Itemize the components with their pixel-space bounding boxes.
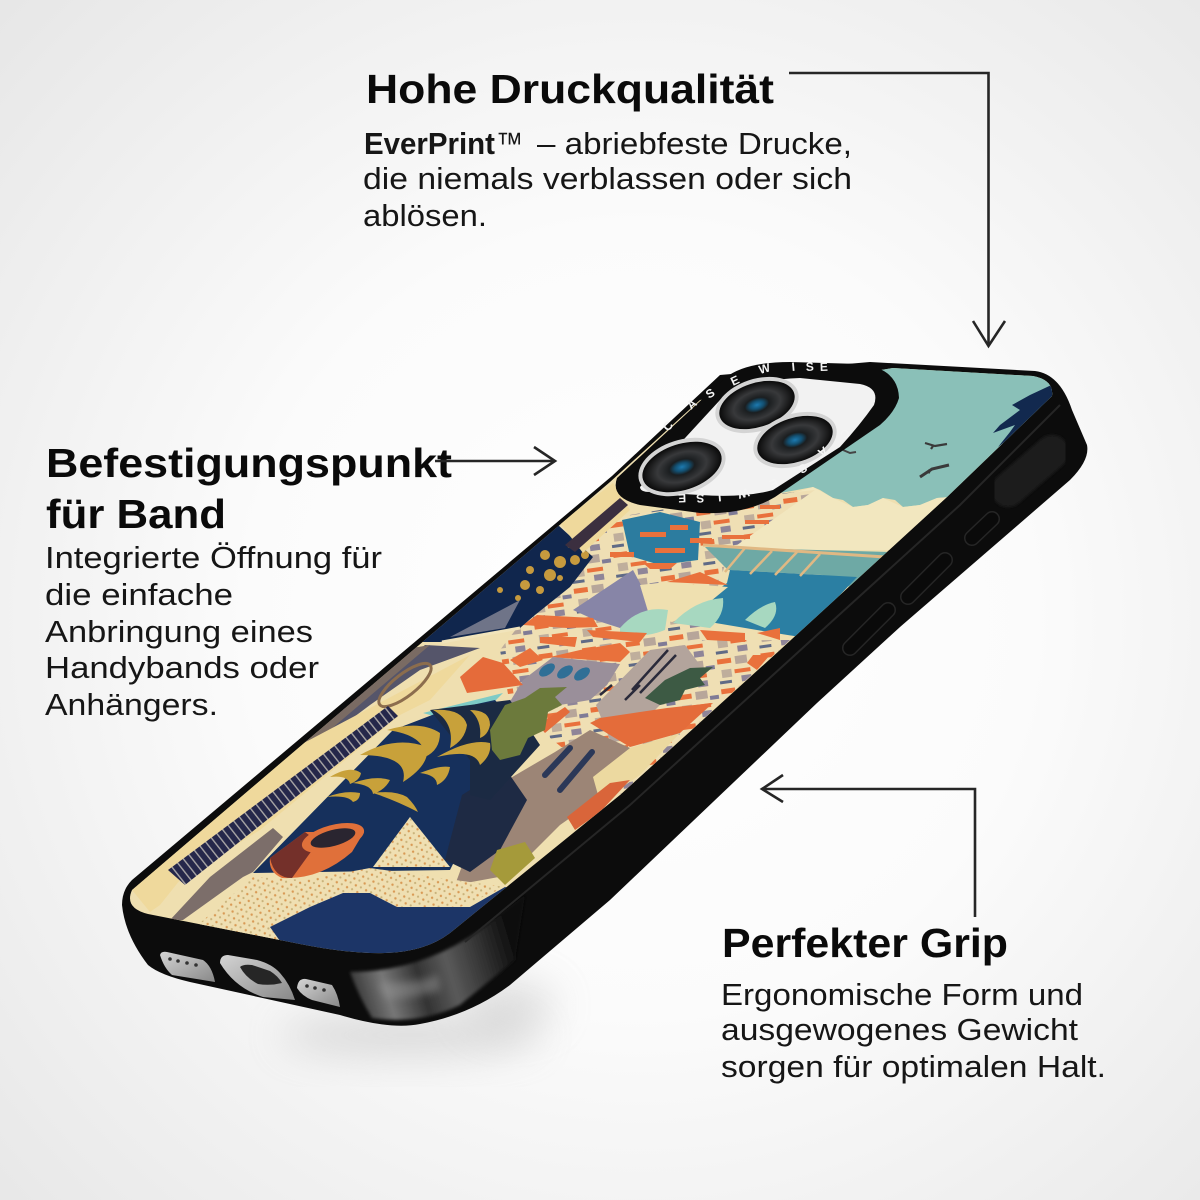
hillside blue houses [622,512,700,565]
bird two [920,465,949,477]
glass plate [640,378,875,496]
teal building [423,693,503,717]
dark window strip [168,706,398,885]
bridge [703,545,885,576]
dark tree canopy [422,526,593,642]
sky [781,368,1052,507]
far water band [705,547,892,588]
big orange roof [460,657,523,693]
rim bevel line [465,405,1060,942]
text: strap attachment: Handybands oder [45,650,319,685]
hillside roofs [610,505,780,557]
brand text lower: CASEWISE [678,426,853,505]
text: grip: sorgen für optimalen Halt. [721,1049,1106,1084]
lens right [746,402,844,478]
text: strap attachment: die einfache [45,577,233,612]
roofs [510,563,780,670]
text: print quality: – abriebfeste Drucke, [537,126,852,161]
yellow palm fronds [327,710,490,812]
text: print quality [363,126,852,233]
arcade building [510,657,620,705]
lower right tan building [455,730,630,885]
navy plaza [253,700,497,873]
building arches [542,745,595,793]
upper windows [565,498,628,552]
tower dark windows [600,650,676,700]
small orange awning [543,707,570,733]
edge brown band [300,645,430,745]
swirl band [330,645,480,735]
arrow: grip [762,775,975,917]
arcade windows [539,663,590,681]
gray column [170,828,283,920]
glossy corner highlight [350,916,514,1022]
dark building arches [445,768,527,872]
heading: strap attachment: für Band [46,491,226,537]
top-left window strip [560,483,630,553]
cream palace [640,582,728,622]
left speaker cut-out [160,952,215,982]
text: print quality: die niemals verblassen oder sich [363,161,852,196]
lens left [631,427,733,507]
callout: grip [721,920,1106,1084]
side panel [1008,452,1052,490]
clouds [720,487,950,550]
callout: strap attachment [45,440,452,722]
domes [620,598,776,636]
arrow: print quality [789,73,1005,346]
building right orange [567,780,630,830]
canopy leaves [497,546,589,601]
callout: print quality [363,66,852,233]
case body [122,362,1087,1026]
planter pot [270,817,367,878]
tower building [596,645,700,745]
plaza paving [200,868,505,945]
heading: strap attachment [46,440,452,537]
side button small [972,519,992,538]
mauve building [573,570,648,628]
volume up button [908,560,945,597]
highlight streak [378,975,440,998]
text: strap attachment [45,540,382,722]
bird one [925,443,947,449]
dark tree base [430,700,540,800]
heading: strap attachment: Befestigungspunkt [46,440,452,486]
paving triangle [373,817,450,867]
text: strap attachment: Integrierte Öffnung für [45,540,382,575]
right low bush [490,842,535,885]
camera ring [616,362,899,513]
heading: print quality: Hohe Druckqualität [366,66,774,112]
phone drop shadow [280,981,555,1055]
bird three [843,450,856,453]
USB port opening [220,955,295,1000]
arrow: strap attachment [435,447,555,475]
green palm [490,687,567,760]
palm silhouette top right [993,382,1060,447]
printed artwork [130,368,1052,954]
balcony rail [442,600,520,642]
lower right red roof [590,703,713,747]
text: print quality: ablösen. [363,198,487,233]
text: print quality: ™ [496,126,523,161]
text: print quality: EverPrint [364,126,495,161]
text: grip: ausgewogenes Gewicht [721,1012,1078,1047]
rosette [377,662,433,708]
volume down button [850,610,888,648]
text: grip: Ergonomische Form und [721,977,1083,1012]
brand text upper: CASEWISE [660,360,828,434]
right palm [645,667,713,705]
shadow on paving [270,887,520,960]
lens top [708,367,806,443]
text: strap attachment: Anbringung eines [45,614,313,649]
heading: grip: Perfekter Grip [722,920,1008,966]
phone case [100,350,1100,1026]
blue water [712,570,857,636]
cream wall [593,733,680,793]
right speaker cut-out [297,979,340,1007]
artwork base [130,368,1052,954]
city blocks [500,490,815,795]
camera island [616,360,899,513]
text: strap attachment: Anhängers. [45,687,218,722]
text: grip [721,977,1106,1084]
cream carved strip [132,655,470,912]
